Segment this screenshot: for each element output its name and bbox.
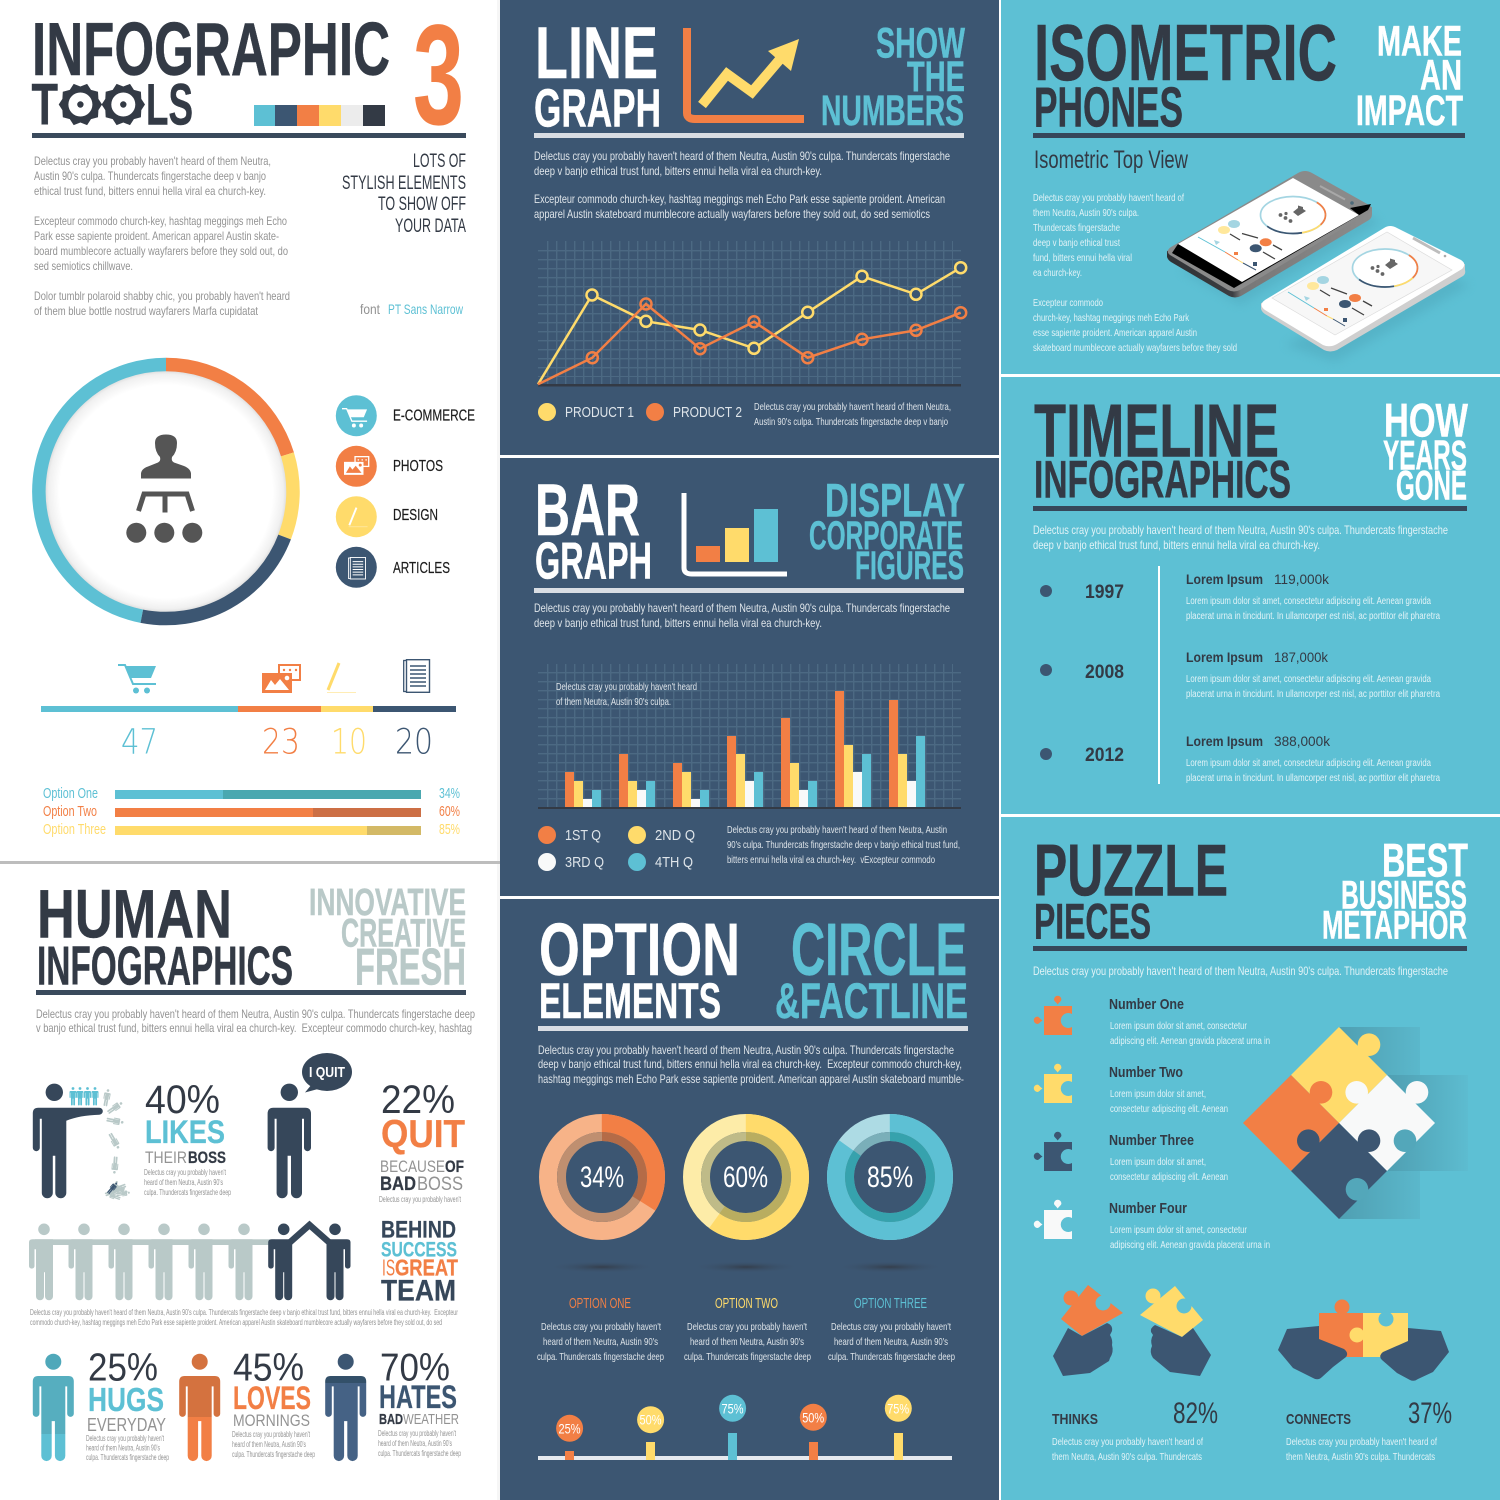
timeline entry 2008: Lorem Ipsum	[1186, 649, 1263, 665]
timeline entry 1997: placerat urna in tincidunt. In ullamcorper est nisl, ac porttitor elit pharetra	[1186, 611, 1440, 622]
puzzle list: number four	[1034, 1200, 1270, 1251]
isometric intro text: Thundercats fingerstache	[1033, 222, 1120, 234]
stat: 70% hates bad weather: 70%	[380, 1347, 450, 1390]
panel: option elements header: &FACTLINE	[775, 973, 968, 1029]
stat: 25% hugs everyday	[33, 1347, 169, 1462]
panel: line graph header: NUMBERS	[821, 88, 964, 135]
pictogram: boss pushing people	[33, 1084, 130, 1201]
panel: line graph header: LINE	[535, 11, 658, 94]
panel: puzzle pieces header	[1033, 828, 1468, 978]
puzzle list: number two: consectetur adipiscing elit. Aenean	[1110, 1104, 1228, 1115]
panel: bar graph header: DISPLAY	[825, 474, 965, 528]
stat: connects 37%: them Neutra, Austin 90's culpa. Thundercats	[1286, 1451, 1435, 1463]
tagline: TO SHOW OFF	[378, 194, 466, 215]
option progress bars	[43, 785, 460, 838]
slogan: behind success is great team	[381, 1217, 458, 1308]
option progress bars: Option Three	[43, 821, 106, 838]
intro text: Delectus cray you probably haven't heard of them Neutra,	[34, 154, 271, 168]
panel: puzzle pieces header: PIECES	[1034, 892, 1151, 950]
segmented bar with icons and numbers: 10	[331, 722, 367, 762]
stat: 40% likes their boss: heard of them Neutra, Austin 90's	[144, 1178, 223, 1187]
series: product 1	[538, 262, 966, 384]
intro text	[34, 154, 290, 318]
bar chart legend: Delectus cray you probably haven't heard of them Neutra, Austin	[727, 824, 947, 836]
panel: isometric phones header: AN	[1420, 52, 1462, 100]
timeline entry 2012: 388,000k	[1274, 733, 1331, 749]
fact line with lollipop markers: 50%	[802, 1409, 824, 1425]
option elements intro text: deep v banjo ethical trust fund, bitters ennui hella viral ea church-key. Excepteur commodo church-key,	[538, 1057, 962, 1071]
isometric intro text: deep v banjo ethical trust	[1033, 237, 1120, 249]
panel: option elements header: OPTION	[539, 908, 740, 991]
stat: 70% hates bad weather: WEATHER	[403, 1411, 459, 1428]
donut: 34%	[548, 1123, 656, 1231]
segmented bar with icons and numbers: 23	[262, 722, 300, 762]
stat: 45% loves mornings: MORNINGS	[233, 1411, 310, 1430]
panel: puzzle pieces header: PUZZLE	[1034, 828, 1228, 912]
line chart	[538, 241, 966, 386]
panel: isometric phones header: PHONES	[1034, 76, 1183, 138]
legend item: photos: PHOTOS	[393, 458, 443, 475]
stat: 22% quit because of bad boss: Delectus cray you probably haven't	[379, 1195, 462, 1204]
puzzle list: number four: Lorem ipsum dolor sit amet, consectetur	[1110, 1225, 1248, 1236]
icon: cart	[118, 665, 156, 694]
stat: 40% likes their boss: Delectus cray you probably haven't	[144, 1168, 227, 1177]
option elements intro text	[538, 1043, 964, 1086]
donut: 34%: 34%	[580, 1161, 624, 1194]
option one text: heard of them Neutra, Austin 90's	[543, 1336, 658, 1348]
title: infographic: INFOGRAPHIC	[32, 7, 390, 91]
isometric intro text: fund, bitters ennui hella viral	[1033, 252, 1132, 264]
font credit: PT Sans Narrow	[388, 301, 464, 317]
panel: bar graph header: BAR	[535, 468, 640, 551]
stat: 25% hugs everyday: 25%	[88, 1347, 158, 1390]
team caption	[30, 1308, 458, 1327]
timeline entry 2012: placerat urna in tincidunt. In ullamcorper est nisl, ac porttitor elit pharetra	[1186, 773, 1440, 784]
stat: 45% loves mornings: 45%	[233, 1347, 304, 1390]
stat: 22% quit because of bad boss: OF	[445, 1157, 464, 1176]
speech bubble: I QUIT	[309, 1064, 345, 1081]
font credit	[360, 301, 464, 317]
stat: 70% hates bad weather: Delectus cray you probably haven't	[378, 1429, 456, 1438]
stat: 22% quit because of bad boss: BAD	[380, 1174, 416, 1195]
donut: 85%: 85%	[867, 1161, 913, 1194]
line graph intro text: deep v banjo ethical trust fund, bitters ennui hella viral ea church-key.	[534, 164, 822, 178]
team caption: commodo church-key, hashtag meggings meh Echo Park esse sapiente proident. American apparel Austin skateboard mumblecore actually wayfarers before they sold out, do sed	[30, 1318, 442, 1327]
timeline entry 1997: Lorem ipsum dolor sit amet, consectetur adipiscing elit. Aenean gravida	[1186, 596, 1431, 607]
panel: isometric phones header: ISOMETRIC	[1034, 8, 1337, 97]
puzzle list: number three	[1034, 1132, 1228, 1183]
isometric intro text	[1033, 192, 1237, 354]
fact line with lollipop markers: 50%	[640, 1412, 662, 1428]
line chart legend: Delectus cray you probably haven't heard of them Neutra,	[754, 401, 951, 413]
isometric intro text: Excepteur commodo	[1033, 297, 1103, 309]
stat: 25% hugs everyday: culpa. Thundercats fingerstache deep	[86, 1453, 169, 1462]
panel: line graph header: THE	[907, 54, 965, 101]
timeline entry 2008	[1040, 649, 1440, 700]
icon: pencil	[327, 663, 356, 692]
stat: 22% quit because of bad boss: QUIT	[381, 1113, 465, 1156]
panel: isometric phones header: Isometric Top View	[1034, 146, 1189, 174]
bar chart	[538, 664, 961, 809]
panel: bar graph header: CORPORATE	[809, 514, 963, 558]
panel: timeline infographics header: INFOGRAPHICS	[1034, 450, 1291, 510]
line graph intro text: Delectus cray you probably haven't heard of them Neutra, Austin 90's culpa. Thundercats fingerstache	[534, 149, 950, 163]
puzzle list: number three: Lorem ipsum dolor sit amet,	[1110, 1157, 1206, 1168]
option progress bars: Option One	[43, 785, 98, 802]
panel: human infographics header: CREATIVE	[341, 912, 466, 956]
isometric intro text: skateboard mumblecore actually wayfarers before they sold	[1033, 342, 1237, 354]
stat: thinks 82%	[1052, 1397, 1218, 1463]
fact line with lollipop markers: 25%	[558, 1420, 580, 1436]
panel: isometric phones header	[1033, 8, 1465, 174]
icon: person hierarchy	[126, 434, 202, 543]
pictogram: team row	[29, 1224, 350, 1300]
speech bubble	[302, 1053, 352, 1092]
stat: thinks 82%: 82%	[1173, 1397, 1218, 1430]
puzzle list: number one: Lorem ipsum dolor sit amet, consectetur	[1110, 1021, 1248, 1032]
intro text: Park esse sapiente proident. American apparel Austin skate-	[34, 229, 279, 243]
fact line with lollipop markers	[538, 1395, 952, 1460]
bar chart: Delectus cray you probably haven't heard	[556, 681, 697, 693]
slogan: behind success is great team: IS	[382, 1255, 395, 1281]
panel: timeline infographics header: deep v banjo ethical trust fund, bitters ennui hella viral ea church-key.	[1033, 538, 1320, 552]
panel: human infographics header: HUMAN	[37, 876, 232, 952]
segmented bar with icons and numbers: 47	[121, 722, 158, 762]
stat: 40% likes their boss: THEIR	[145, 1148, 187, 1167]
series: product 2	[538, 298, 966, 384]
donut chart with hierarchy icon	[39, 364, 293, 619]
option one text	[537, 1295, 664, 1363]
fact line with lollipop markers: 75%	[887, 1400, 909, 1416]
tagline: LOTS OF	[413, 151, 466, 172]
stat: connects 37%: CONNECTS	[1286, 1411, 1351, 1428]
option two text	[684, 1295, 811, 1363]
legend: categories	[336, 395, 475, 588]
stat: 70% hates bad weather	[325, 1347, 461, 1461]
panel: timeline infographics header: HOW	[1384, 394, 1468, 448]
stat: 70% hates bad weather: HATES	[379, 1379, 457, 1415]
bar graph intro text: Delectus cray you probably haven't heard of them Neutra, Austin 90's culpa. Thundercats fingerstache	[534, 601, 950, 615]
intro text: Dolor tumblr polaroid shabby chic, you probably haven't heard	[34, 289, 290, 303]
puzzle list: number four: Number Four	[1109, 1200, 1187, 1217]
stat: connects 37%	[1286, 1397, 1452, 1463]
fact line with lollipop markers: 75%	[722, 1400, 744, 1416]
timeline entry 1997	[1040, 571, 1440, 622]
title: tools: T	[32, 72, 58, 138]
big numeral 3: 3	[413, 0, 464, 155]
donut: 60%	[692, 1123, 800, 1231]
segmented bar with icons and numbers: 20	[395, 722, 433, 762]
line chart legend: PRODUCT 2	[673, 404, 742, 421]
icon: rising chart	[687, 28, 804, 119]
stat: 22% quit because of bad boss: BOSS	[417, 1174, 463, 1195]
intro text: Excepteur commodo church-key, hashtag meggings meh Echo	[34, 214, 287, 228]
stat: 45% loves mornings: Delectus cray you probably haven't	[232, 1430, 310, 1439]
slogan: behind success is great team: SUCCESS	[381, 1239, 457, 1262]
line chart legend: Austin 90's culpa. Thundercats fingerstache deep v banjo	[754, 416, 948, 428]
option elements intro text: hashtag meggings meh Echo Park esse sapiente proident. American apparel Austin skateboard mumble-	[538, 1072, 964, 1086]
isometric intro text: church-key, hashtag meggings meh Echo Park	[1033, 312, 1190, 324]
panel: option elements header	[538, 908, 968, 1031]
panel: bar graph header: FIGURES	[855, 544, 964, 588]
stat: 22% quit because of bad boss	[379, 1078, 465, 1204]
option progress bars: Option Two	[43, 803, 97, 820]
timeline entry 2012: 2012	[1085, 745, 1124, 766]
illustration: black isometric phone	[1167, 171, 1380, 305]
palette swatches	[254, 105, 385, 126]
stat: 25% hugs everyday: EVERYDAY	[87, 1415, 166, 1435]
line chart legend	[538, 401, 951, 428]
bar chart legend: 2ND Q	[655, 827, 695, 844]
stat: 25% hugs everyday: HUGS	[88, 1381, 164, 1418]
option three text: Delectus cray you probably haven't	[831, 1321, 951, 1333]
panel: human infographics header	[36, 876, 475, 1035]
font credit: font	[360, 301, 380, 317]
puzzle list: number four: adipiscing elit. Aenean gravida placerat urna in	[1110, 1240, 1270, 1251]
tagline: YOUR DATA	[395, 216, 466, 237]
puzzle list: number two: Lorem ipsum dolor sit amet,	[1110, 1089, 1206, 1100]
timeline entry 1997: 1997	[1085, 582, 1124, 603]
option one text: culpa. Thundercats fingerstache deep	[537, 1351, 664, 1363]
title: tools	[32, 72, 193, 138]
option three text: OPTION THREE	[854, 1295, 927, 1312]
line graph intro text: apparel Austin skateboard mumblecore actually wayfarers before they sold out, do sed semiotics	[534, 207, 930, 221]
stat: 22% quit because of bad boss: BECAUSE	[380, 1157, 445, 1176]
panel: option elements header: CIRCLE	[791, 908, 967, 991]
bar chart legend	[538, 824, 960, 871]
stat: 70% hates bad weather: heard of them Neutra, Austin 90's	[378, 1439, 452, 1448]
stat: 45% loves mornings: heard of them Neutra, Austin 90's	[232, 1440, 306, 1449]
stat: thinks 82%: THINKS	[1052, 1411, 1098, 1428]
donut floor shadows	[547, 1261, 945, 1273]
timeline entry 1997: Lorem Ipsum	[1186, 571, 1263, 587]
panel: line graph header: GRAPH	[534, 78, 661, 138]
bar chart legend: 4TH Q	[655, 854, 693, 871]
tagline: STYLISH ELEMENTS	[342, 173, 466, 194]
panel: timeline infographics header	[1033, 388, 1468, 552]
team caption: Delectus cray you probably haven't heard of them Neutra, Austin 90's culpa. Thundercats fingerstache deep v banjo ethical trust fund, bitters ennui hella viral ea church-key. Excepteur	[30, 1308, 458, 1317]
segmented bar with icons and numbers	[41, 660, 456, 762]
puzzle list: number one: Number One	[1109, 996, 1184, 1013]
timeline entry 2012: Lorem ipsum dolor sit amet, consectetur adipiscing elit. Aenean gravida	[1186, 758, 1431, 769]
legend item: e-commerce: E-COMMERCE	[393, 408, 475, 424]
legend item: articles	[336, 547, 450, 588]
legend item: design: DESIGN	[393, 507, 438, 524]
stat: 22% quit because of bad boss: 22%	[381, 1078, 455, 1122]
intro text: board mumblecore actually wayfarers before they sold out, do	[34, 244, 288, 258]
stat: 70% hates bad weather: culpa. Thundercats fingerstache deep	[378, 1449, 461, 1458]
stat: thinks 82%: them Neutra, Austin 90's culpa. Thundercats	[1052, 1451, 1202, 1463]
panel: human infographics header: v banjo ethical trust fund, bitters ennui hella viral ea church-key. Excepteur commodo church-key, hashtag	[36, 1021, 472, 1035]
option two text: culpa. Thundercats fingerstache deep	[684, 1351, 811, 1363]
panel: line graph header	[534, 11, 966, 138]
bar graph intro text: deep v banjo ethical trust fund, bitters ennui hella viral ea church-key.	[534, 616, 822, 630]
intro text: ethical trust fund, bitters ennui hella viral ea church-key.	[34, 184, 266, 198]
option two text: OPTION TWO	[715, 1295, 778, 1312]
option progress bars: 85%	[439, 821, 460, 838]
timeline	[1040, 566, 1440, 784]
pictogram: person quitting with speech bubble	[268, 1053, 352, 1198]
panel: bar graph header	[534, 468, 965, 593]
stat: connects 37%: Delectus cray you probably haven't heard of	[1286, 1436, 1437, 1448]
bar graph intro text	[534, 601, 950, 630]
icon: bars	[684, 493, 787, 574]
panel: infographic tools header	[32, 0, 466, 155]
stat: 40% likes their boss	[144, 1078, 231, 1197]
tagline	[342, 151, 466, 237]
puzzle list: number three: Number Three	[1109, 1132, 1194, 1149]
illustration: white isometric phone	[1261, 226, 1470, 362]
panel: human infographics header: Delectus cray you probably haven't heard of them Neutra, Austin 90's culpa. Thundercats fingerstache deep	[36, 1007, 475, 1021]
puzzle list: number two	[1034, 1064, 1228, 1115]
panel: isometric phones header: MAKE	[1377, 18, 1462, 66]
option one text: OPTION ONE	[569, 1295, 631, 1312]
donut: 60%: 60%	[723, 1161, 768, 1194]
timeline entry 2008: 2008	[1085, 662, 1124, 683]
illustration: hands holding separate pieces	[1053, 1285, 1211, 1376]
legend item: articles: ARTICLES	[393, 560, 450, 577]
line chart legend: PRODUCT 1	[565, 404, 634, 421]
illustration: hands joining pieces	[1278, 1300, 1449, 1381]
stat: 40% likes their boss: BOSS	[188, 1148, 226, 1167]
panel: human infographics header: FRESH	[355, 938, 466, 996]
slogan: behind success is great team: GREAT	[395, 1255, 458, 1281]
bar chart legend: 3RD Q	[565, 854, 604, 871]
slogan: behind success is great team: TEAM	[381, 1275, 456, 1308]
stat: 70% hates bad weather: BAD	[379, 1411, 403, 1428]
puzzle list: number three: consectetur adipiscing elit. Aenean	[1110, 1172, 1228, 1183]
slogan: behind success is great team: BEHIND	[381, 1217, 456, 1244]
isometric intro text: ea church-key.	[1033, 267, 1082, 279]
timeline entry 2012: Lorem Ipsum	[1186, 733, 1263, 749]
bar chart legend: 1ST Q	[565, 827, 601, 844]
icon: photos	[262, 665, 300, 693]
option progress bars: 34%	[439, 785, 460, 802]
option progress bars: 60%	[439, 803, 460, 820]
stat: connects 37%: 37%	[1408, 1397, 1452, 1430]
timeline entry 1997: 119,000k	[1274, 571, 1330, 587]
option two text: Delectus cray you probably haven't	[687, 1321, 807, 1333]
option three text: heard of them Neutra, Austin 90's	[834, 1336, 948, 1348]
panel: human infographics header: INNOVATIVE	[309, 882, 466, 924]
isometric intro text: them Neutra, Austin 90's culpa.	[1033, 207, 1139, 219]
timeline entry 2012	[1040, 733, 1440, 784]
intro text: of them blue bottle nostrud wayfarers Marfa cupidatat	[34, 304, 259, 318]
panel: line graph header: SHOW	[876, 20, 966, 68]
stat: 25% hugs everyday: Delectus cray you probably haven't	[86, 1434, 164, 1443]
legend item: design	[336, 496, 438, 537]
bar chart: of them Neutra, Austin 90's culpa.	[556, 696, 671, 708]
option three text: culpa. Thundercats fingerstache deep	[828, 1351, 955, 1363]
donut: 85%	[836, 1123, 944, 1231]
stat: 45% loves mornings: culpa. Thundercats fingerstache deep	[232, 1450, 315, 1459]
puzzle list: number two: Number Two	[1109, 1064, 1183, 1081]
panel: bar graph header: GRAPH	[535, 532, 652, 590]
bar chart legend: bitters ennui hella viral ea church-key. vExcepteur commodo	[727, 854, 935, 866]
option two text: heard of them Neutra, Austin 90's	[690, 1336, 804, 1348]
stat: thinks 82%: Delectus cray you probably haven't heard of	[1052, 1436, 1203, 1448]
timeline entry 2008: 187,000k	[1274, 649, 1329, 665]
legend item: e-commerce	[336, 395, 475, 436]
puzzle list: number one: adipiscing elit. Aenean gravida placerat urna in	[1110, 1036, 1270, 1047]
timeline entry 2008: placerat urna in tincidunt. In ullamcorper est nisl, ac porttitor elit pharetra	[1186, 689, 1440, 700]
stat: 45% loves mornings: LOVES	[233, 1380, 311, 1416]
panel: option elements header: ELEMENTS	[539, 973, 721, 1029]
stat: 40% likes their boss: 40%	[145, 1078, 220, 1122]
stat: 25% hugs everyday: heard of them Neutra, Austin 90's	[86, 1444, 160, 1452]
option three text	[828, 1295, 955, 1363]
legend item: photos	[336, 446, 443, 487]
bar chart legend: 90's culpa. Thundercats fingerstache deep v banjo ethical trust fund,	[727, 839, 960, 851]
stat: 45% loves mornings	[179, 1347, 315, 1461]
option elements intro text: Delectus cray you probably haven't heard of them Neutra, Austin 90's culpa. Thundercats fingerstache	[538, 1043, 954, 1057]
icon: document	[404, 660, 430, 692]
line graph intro text: Excepteur commodo church-key, hashtag meggings meh Echo Park esse sapiente proident. American	[534, 192, 945, 206]
panel: timeline infographics header: TIMELINE	[1034, 388, 1279, 472]
line graph intro text	[534, 149, 950, 221]
illustration: assembled puzzle	[1243, 1027, 1468, 1219]
title: tools: LS	[146, 72, 193, 138]
isometric intro text: Delectus cray you probably haven't heard of	[1033, 192, 1184, 204]
option one text: Delectus cray you probably haven't	[541, 1321, 661, 1333]
intro text: Austin 90's culpa. Thundercats fingerstache deep v banjo	[34, 169, 266, 183]
panel: human infographics header: INFOGRAPHICS	[37, 936, 293, 996]
timeline entry 2008: Lorem ipsum dolor sit amet, consectetur adipiscing elit. Aenean gravida	[1186, 674, 1431, 685]
stat: 40% likes their boss: culpa. Thundercats fingerstache deep	[144, 1188, 231, 1197]
intro text: sed semiotics chillwave.	[34, 259, 133, 273]
isometric intro text: esse sapiente proident. American apparel Austin	[1033, 327, 1197, 339]
stat: 40% likes their boss: LIKES	[145, 1114, 225, 1150]
puzzle list: number one	[1034, 996, 1270, 1047]
